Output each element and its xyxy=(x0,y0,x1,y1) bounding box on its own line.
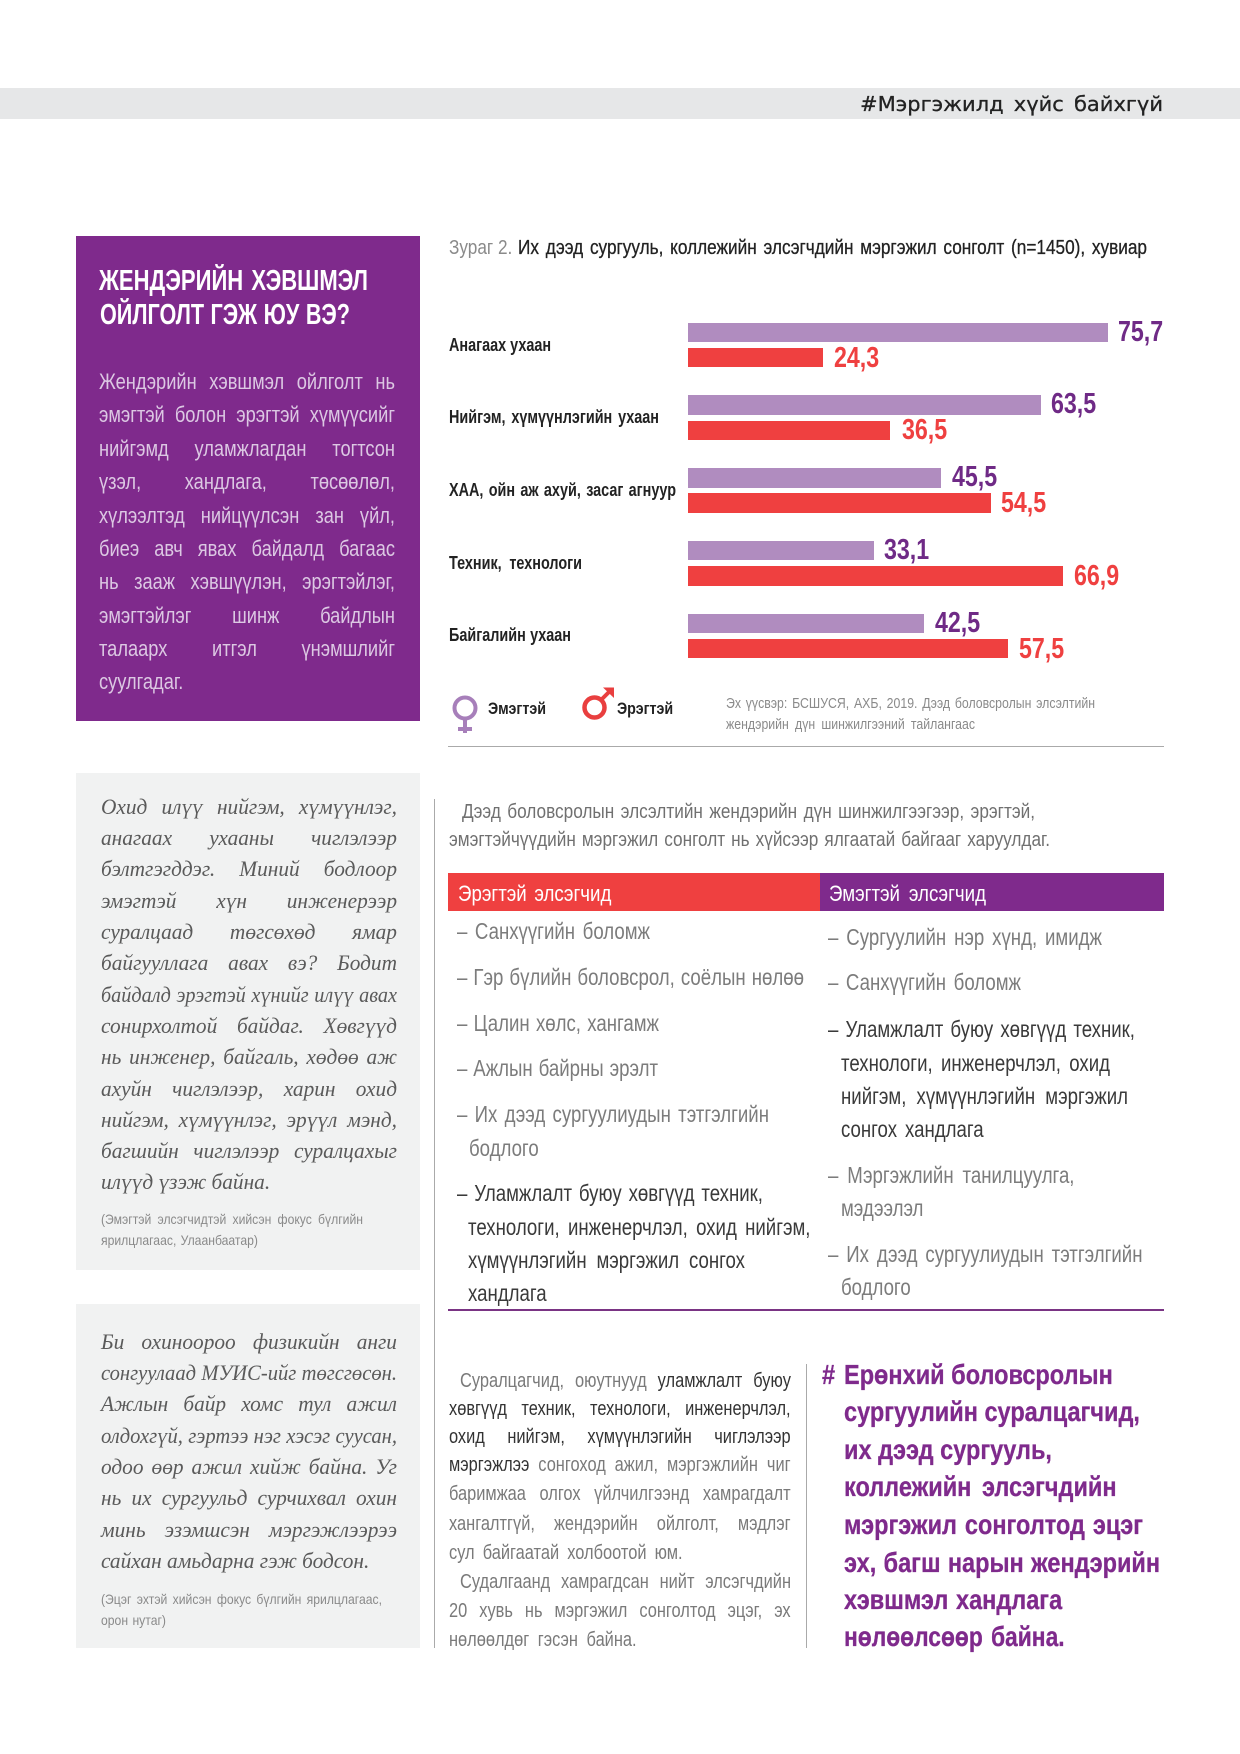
panel body text: эмэгтэйлэг шинж байдлын xyxy=(99,603,395,628)
panel: definition of gender stereotype xyxy=(76,236,420,721)
list: male applicants: хандлага xyxy=(468,1280,547,1306)
quote panel 1: багшийн чиглэлээр суралцахыг xyxy=(101,1138,397,1163)
callout: сургуулийн суралцагчид, xyxy=(844,1396,1140,1427)
callout: эх, багш нарын жендэрийн xyxy=(844,1547,1160,1578)
panel body text: нийгэмд уламжлагдан тогтсон xyxy=(99,436,395,461)
chart row: natural sciences xyxy=(449,607,1064,665)
chart row: natural sciences: Байгалийн ухаан xyxy=(449,625,571,645)
chart row: medicine: 24,3 xyxy=(834,342,879,374)
legend: male: Эрэгтэй xyxy=(617,699,673,718)
callout: хэвшмэл хандлага xyxy=(844,1584,1063,1615)
list: male applicants: технологи, инженерчлэл, охид нийгэм, xyxy=(468,1214,810,1240)
panel body text: үзэл, хандлага, төсөөлөл, xyxy=(99,469,395,494)
list: male applicants: – Цалин хөлс, хангамж xyxy=(457,1010,659,1036)
panel body text: Жендэрийн хэвшмэл ойлголт нь xyxy=(99,369,395,394)
quote panel 1: байдалд эрэгтэй хүнийг илүү авах xyxy=(101,982,397,1007)
quote panel 1: сонирхолтой байдаг. Хөвгүүд xyxy=(101,1013,397,1038)
list: female applicants: нийгэм, хүмүүнлэгийн мэргэжил xyxy=(841,1083,1128,1109)
table: reasons by gender xyxy=(448,873,1164,1311)
chart row: natural sciences: 57,5 xyxy=(1019,633,1064,665)
icon: female symbol xyxy=(452,696,478,733)
paragraph text: 20 хувь нь мэргэжил сонголтод эцэг, эх xyxy=(449,1600,791,1622)
callout: коллежийн элсэгчдийн xyxy=(844,1471,1117,1502)
paragraph text: хангалтгүй, жендэрийн ойлголт, мэдлэг xyxy=(449,1513,791,1535)
intro text xyxy=(449,801,1050,851)
chart title: Зураг 2. xyxy=(449,237,512,259)
list: male applicants: бодлого xyxy=(469,1135,539,1161)
header band: #Мэргэжилд хүйс байхгүй xyxy=(860,92,1163,116)
quote panel 1: илүүд үзэж байна. xyxy=(101,1169,270,1194)
quote panel 1: (Эмэгтэй элсэгчидтэй хийсэн фокус бүлгийн xyxy=(101,1211,363,1227)
panel heading xyxy=(99,264,368,331)
list: male applicants xyxy=(457,918,810,1306)
list: female applicants: технологи, инженерчлэл, охид xyxy=(841,1050,1110,1076)
quote panel 2: олдохгүй, гэртээ нэг хэсэг суусан, xyxy=(101,1423,397,1448)
chart row: agriculture, forestry, veterinary: 45,5 xyxy=(952,461,997,493)
chart row: natural sciences: 42,5 xyxy=(935,607,980,639)
source note xyxy=(726,695,1095,733)
panel heading: ОЙЛГОЛТ ГЭЖ ЮУ ВЭ? xyxy=(100,299,350,331)
quote panel 2: орон нутаг) xyxy=(101,1612,166,1628)
paragraph text: сул байгаатай холбоотой юм. xyxy=(449,1542,683,1564)
list: male applicants: – Санхүүгийн боломж xyxy=(457,918,650,944)
quote panel 1: ярилцлагаас, Улаанбаатар) xyxy=(101,1232,258,1248)
paragraph text: охид нийгэм, хүмүүнлэгийн чиглэлээр xyxy=(449,1426,791,1448)
header band xyxy=(0,88,1240,119)
quote panel 1: анагаах ухааны чиглэлээр xyxy=(101,825,397,850)
list: male applicants: – Их дээд сургуулиудын тэтгэлгийн xyxy=(457,1101,769,1127)
chart row: agriculture, forestry, veterinary xyxy=(449,461,1046,519)
quote panel 1: эмэгтэй хүн инженерээр xyxy=(101,888,397,913)
intro text: Дээд боловсролын элсэлтийн жендэрийн дүн шинжилгээгээр, эрэгтэй, xyxy=(462,801,1034,823)
quote panel 2: одоо өөр ажил хийж байна. Уг xyxy=(101,1454,397,1479)
panel body text xyxy=(99,369,395,694)
chart row: agriculture, forestry, veterinary: 54,5 xyxy=(1001,487,1046,519)
source note: жендэрийн дүн шинжилгээний тайлангаас xyxy=(726,716,975,733)
chart row: medicine: 75,7 xyxy=(1118,316,1163,348)
table header: male applicants xyxy=(448,873,820,911)
callout: # xyxy=(822,1359,835,1390)
chart row: social sciences and humanities: Нийгэм, хүмүүнлэгийн ухаан xyxy=(449,407,659,427)
callout: их дээд сургууль, xyxy=(844,1434,1052,1465)
list: female applicants: – Их дээд сургуулиудын тэтгэлгийн xyxy=(828,1241,1142,1267)
icon: male symbol xyxy=(582,688,614,720)
list: female applicants xyxy=(828,924,1142,1300)
list: male applicants: – Уламжлалт буюу хөвгүүд техник, xyxy=(457,1180,763,1206)
quote panel 2: сонгуулаад МУИС-ийг төгсгөсөн. xyxy=(101,1360,397,1385)
panel body text: нь зааж хэвшүүлэн, эрэгтэйлэг, xyxy=(99,569,395,594)
chart row: engineering and technology: 66,9 xyxy=(1074,560,1119,592)
table header: male applicants: Эрэгтэй элсэгчид xyxy=(458,881,611,906)
quote panel 1: ахуйн чиглэлээр, харин охид xyxy=(101,1076,397,1101)
list: female applicants: бодлого xyxy=(841,1274,911,1300)
list: female applicants: сонгох хандлага xyxy=(841,1116,984,1142)
source note: Эх үүсвэр: БСШУСЯ, АХБ, 2019. Дээд боловсролын элсэлтийн xyxy=(726,695,1095,712)
quote panel 1: Охид илүү нийгэм, хүмүүнлэг, xyxy=(101,794,397,819)
quote panel 2: сайхан амьдарна гэж бодсон. xyxy=(101,1548,369,1573)
quote panel 1 xyxy=(76,773,420,1270)
panel body text: суулгадаг. xyxy=(99,669,183,694)
list: male applicants: – Ажлын байрны эрэлт xyxy=(457,1055,658,1081)
chart row: medicine xyxy=(449,316,1163,374)
callout: Ерөнхий боловсролын xyxy=(844,1359,1113,1390)
panel body text: биеэ авч явах байдалд багаас xyxy=(99,536,395,561)
paragraph text: мэргэжлээ сонгоход ажил, мэргэжлийн чиг xyxy=(449,1454,791,1476)
chart row: medicine: Анагаах ухаан xyxy=(449,335,551,355)
paragraph text: нөлөөлдөг гэсэн байна. xyxy=(449,1629,637,1651)
quote panel 2: нь их сургуульд сурчихвал охин xyxy=(101,1485,397,1510)
list: female applicants: – Санхүүгийн боломж xyxy=(828,969,1021,995)
chart row: engineering and technology xyxy=(449,534,1119,592)
panel body text: хүлээлтэд нийцүүлсэн зан үйл, xyxy=(99,503,395,528)
quote panel 2: Би охиноороо физикийн анги xyxy=(101,1329,397,1354)
chart row: social sciences and humanities: 36,5 xyxy=(902,414,947,446)
bar chart: major choice by gender xyxy=(449,237,1163,733)
panel heading: ЖЕНДЭРИЙН ХЭВШМЭЛ xyxy=(99,265,368,297)
chart row: agriculture, forestry, veterinary: ХАА, ойн аж ахуй, засаг агнуур xyxy=(449,480,676,500)
chart row: social sciences and humanities xyxy=(449,388,1096,446)
paragraph text xyxy=(449,1370,791,1651)
paragraph text: хөвгүүд техник, технологи, инженерчлэл, xyxy=(449,1398,791,1420)
callout: мэргэжил сонголтод эцэг xyxy=(844,1509,1143,1540)
list: male applicants: – Гэр бүлийн боловсрол, соёлын нөлөө xyxy=(457,964,804,990)
chart row: social sciences and humanities: 63,5 xyxy=(1051,388,1096,420)
legend: male xyxy=(582,688,673,720)
quote panel 1: нь инженер, байгаль, хөдөө аж xyxy=(101,1044,397,1069)
callout xyxy=(822,1359,1160,1652)
quote panel 2: (Эцэг эхтэй хийсэн фокус бүлгийн ярилцлагаас, xyxy=(101,1591,382,1607)
quote panel 1: нийгэм, хүмүүнлэг, эрүүл мэнд, xyxy=(101,1107,397,1132)
list: female applicants: – Сургуулийн нэр хүнд, имидж xyxy=(828,924,1102,950)
table header: female applicants xyxy=(820,873,1164,911)
panel body text: талаарх итгэл үнэмшлийг xyxy=(99,636,395,661)
quote panel 1: бэлтгэгддэг. Миний бодлоор xyxy=(101,856,397,881)
panel body text: эмэгтэй болон эрэгтэй хүмүүсийг xyxy=(99,402,395,427)
table header: female applicants: Эмэгтэй элсэгчид xyxy=(829,881,986,906)
list: female applicants: – Уламжлалт буюу хөвгүүд техник, xyxy=(828,1016,1135,1042)
chart row: engineering and technology: 33,1 xyxy=(884,534,929,566)
legend: female xyxy=(452,696,546,733)
quote panel 2 xyxy=(76,1304,420,1648)
list: female applicants: мэдээлэл xyxy=(841,1195,923,1221)
quote panel 2: минь эзэмшсэн мэргэжлээрээ xyxy=(101,1517,397,1542)
legend: female: Эмэгтэй xyxy=(488,699,546,718)
chart row: engineering and technology: Техник, технологи xyxy=(449,553,582,573)
list: female applicants: – Мэргэжлийн танилцуулга, xyxy=(828,1162,1074,1188)
list: male applicants: хүмүүнлэгийн мэргэжил сонгох xyxy=(468,1247,745,1273)
paragraph text: баримжаа олгох үйлчилгээнд хамрагдалт xyxy=(449,1483,791,1505)
intro text: эмэгтэйчүүдийн мэргэжил сонголт нь хүйсээр ялгаатай байгааг харуулдаг. xyxy=(449,829,1050,851)
chart title: Их дээд сургууль, коллежийн элсэгчдийн мэргэжил сонголт (n=1450), хувиар xyxy=(518,237,1147,259)
callout: нөлөөлсөөр байна. xyxy=(844,1621,1065,1652)
quote panel 2: Ажлын байр хомс тул ажил xyxy=(101,1391,397,1416)
paragraph text: Судалгаанд хамрагдсан нийт элсэгчдийн xyxy=(460,1571,791,1593)
quote panel 1: суралцаад төгсөхөд ямар xyxy=(101,919,397,944)
quote panel 1: байгууллага авах вэ? Бодит xyxy=(101,950,397,975)
paragraph text: Суралцагчид, оюутнууд уламжлалт буюу xyxy=(460,1370,791,1392)
